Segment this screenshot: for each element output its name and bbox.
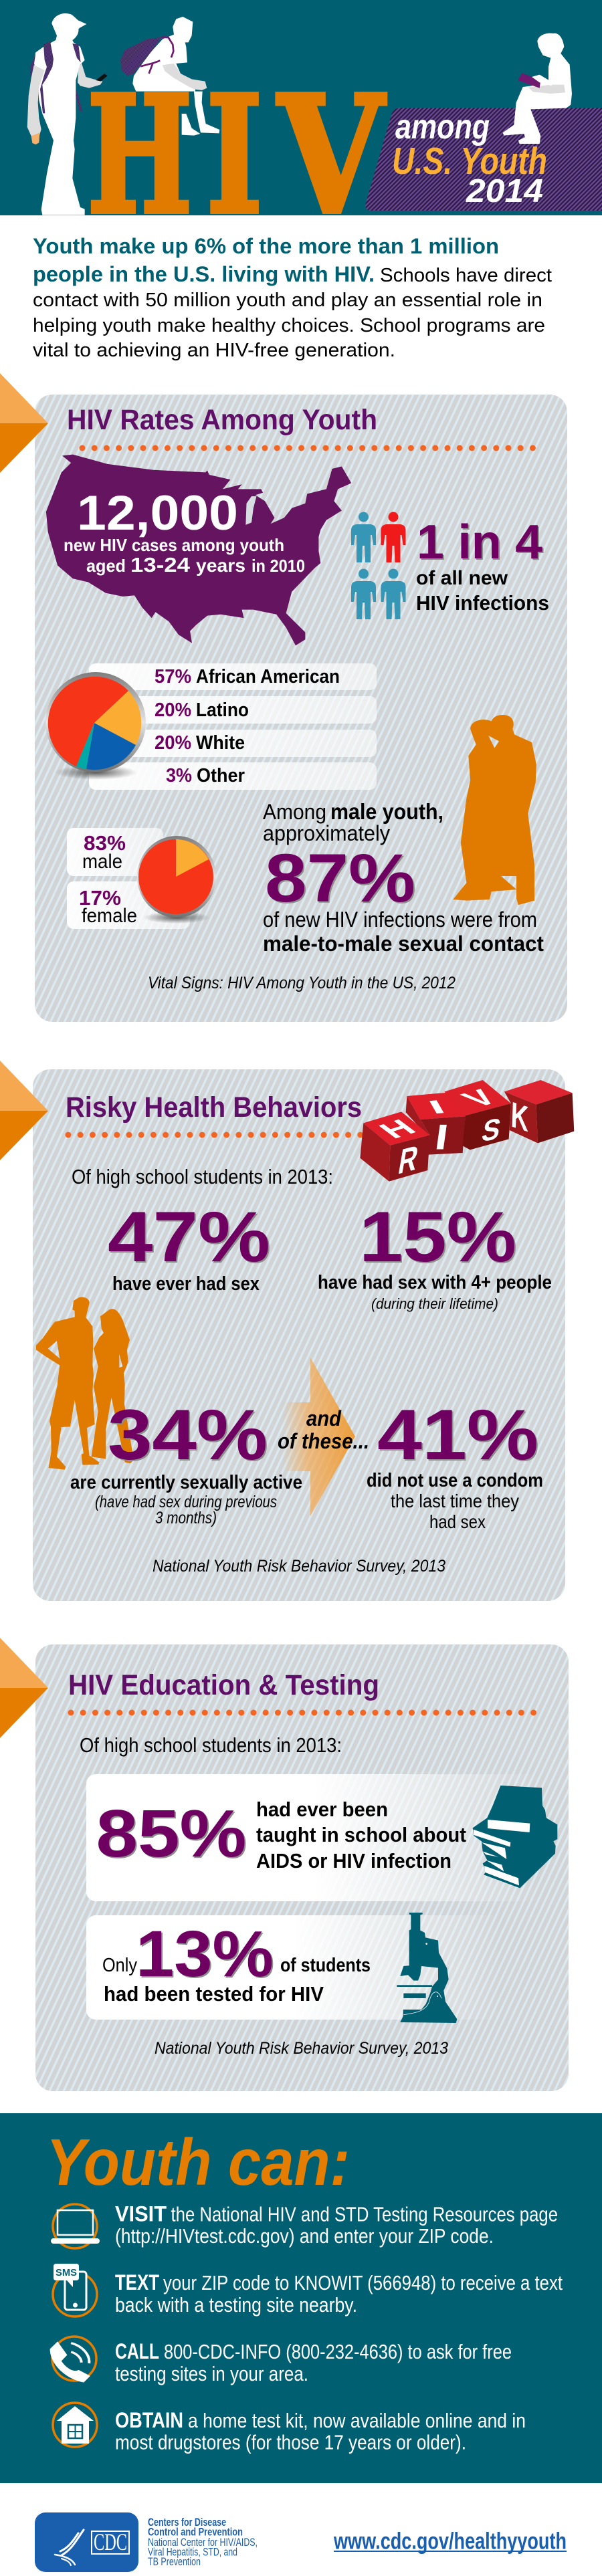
heading: Risky Health Behaviors: Risky Health Behaviors bbox=[66, 1091, 362, 1123]
race breakdown bars: Latino bbox=[196, 700, 249, 721]
item: obtain: most drugstores (for those 17 years or older). bbox=[115, 2430, 466, 2454]
source note: National Youth Risk Behavior Survey, 2013 bbox=[155, 2039, 448, 2058]
item: call: CALL bbox=[115, 2339, 159, 2363]
item: text: back with a testing site nearby. bbox=[115, 2293, 357, 2317]
stat: 34%: (have had sex during previous bbox=[95, 1493, 277, 1511]
race breakdown bars: 57% bbox=[155, 666, 191, 687]
stat: 1 in 4: of all new bbox=[416, 567, 508, 589]
card: 85% taught in school: 85% bbox=[96, 1796, 246, 1871]
map statistic bbox=[64, 486, 305, 576]
stat: 1 in 4: 1 in 4 bbox=[417, 516, 542, 569]
CDC organization text: TB Prevention bbox=[148, 2555, 201, 2568]
HIV RISK dice: R bbox=[395, 1138, 421, 1182]
item: call bbox=[115, 2339, 512, 2385]
intro text block: vital to achieving an HIV-free generation. bbox=[33, 340, 395, 361]
race breakdown bars: Other bbox=[197, 765, 245, 786]
subtitle text: U.S. Youth bbox=[392, 140, 547, 183]
intro text block: helping youth make healthy choices. School programs are bbox=[33, 315, 545, 336]
stat: 1 in 4: HIV infections bbox=[416, 591, 549, 615]
CDC organization text: National Center for HIV/AIDS, bbox=[148, 2536, 258, 2549]
card: 13% tested: had been tested for HIV bbox=[104, 1982, 324, 2006]
section arrow bbox=[0, 373, 48, 473]
intro text block bbox=[33, 234, 552, 361]
pie chart: gender bbox=[137, 836, 216, 924]
map statistic: 12,000 bbox=[77, 486, 238, 540]
subtitle text: among bbox=[395, 108, 490, 146]
stat: 34%: 3 months) bbox=[155, 1509, 217, 1527]
couple silhouette bbox=[453, 715, 536, 905]
stat: 15%: have had sex with 4+ people bbox=[318, 1272, 552, 1293]
card: 85% taught in school: had ever been bbox=[256, 1798, 388, 1821]
CDC organization text: Viral Hepatitis, STD, and bbox=[148, 2545, 237, 2559]
purple subtitle block bbox=[365, 108, 602, 211]
heading: HIV Education & Testing: HIV Education & Testing bbox=[68, 1669, 379, 1701]
HIV large letters: V bbox=[277, 60, 386, 250]
icon: telephone handset bbox=[50, 2337, 96, 2383]
gender labels: female bbox=[82, 905, 137, 927]
gender labels: 17% bbox=[79, 886, 121, 909]
panel: HIV rates among youth bbox=[0, 373, 567, 1022]
male youth statistic: of new HIV infections were from bbox=[263, 907, 537, 932]
heading: HIV Rates Among Youth: HIV Rates Among Youth bbox=[67, 404, 377, 436]
HIV large letters: H bbox=[87, 60, 193, 250]
card: 85% taught in school: taught in school about bbox=[256, 1823, 466, 1846]
arrow: and of these: and bbox=[306, 1406, 342, 1430]
icon: phone with SMS bbox=[53, 2264, 97, 2317]
stat: 1 in 4 bbox=[416, 516, 549, 615]
HIV RISK dice: I bbox=[424, 1097, 449, 1118]
race breakdown bars: 20% bbox=[155, 732, 191, 754]
icon: four people, one highlighted bbox=[351, 512, 405, 619]
map statistic: in 2010 bbox=[252, 556, 305, 576]
race breakdown bars: White bbox=[196, 732, 245, 754]
item: visit: (http://HIVtest.cdc.gov) and enter your ZIP code. bbox=[115, 2224, 494, 2248]
arrow: and of these: of these... bbox=[278, 1429, 369, 1453]
US map bbox=[46, 455, 351, 645]
lead-in text: Of high school students in 2013: bbox=[72, 1165, 333, 1188]
item: call: testing sites in your area. bbox=[115, 2362, 308, 2385]
stat: 15% bbox=[318, 1196, 552, 1312]
map statistic: aged bbox=[86, 556, 126, 576]
stat: 34% bbox=[70, 1394, 302, 1527]
arrow: and of these bbox=[278, 1358, 369, 1516]
HIV RISK dice bbox=[360, 1080, 574, 1182]
source note: National Youth Risk Behavior Survey, 2013 bbox=[153, 1557, 445, 1576]
stat: 47%: 47% bbox=[108, 1196, 270, 1277]
card: 85% taught in school: AIDS or HIV infection bbox=[256, 1849, 452, 1872]
HHS eagle emblem bbox=[55, 2530, 84, 2565]
heading: Youth can: Youth can: bbox=[46, 2125, 350, 2199]
gender labels: 83% bbox=[84, 831, 126, 855]
lead-in text: Of high school students in 2013: bbox=[80, 1733, 342, 1757]
couple silhouette bbox=[36, 1297, 134, 1470]
male youth statistic bbox=[263, 799, 544, 956]
intro text block: contact with 50 million youth and play an essential role in bbox=[33, 290, 542, 311]
HIV RISK dice: V bbox=[454, 1085, 505, 1111]
card: 13% tested bbox=[86, 1915, 501, 2020]
CDC logo bbox=[35, 2512, 138, 2572]
stat: 34%: are currently sexually active bbox=[70, 1472, 302, 1493]
card: 85% taught in school bbox=[86, 1774, 541, 1901]
gender labels bbox=[67, 828, 190, 929]
intro text block: Youth make up 6% of the more than 1 million bbox=[33, 234, 499, 258]
header banner bbox=[0, 0, 602, 250]
icon: phone with SMS: SMS bbox=[56, 2267, 77, 2278]
item: text: TEXT bbox=[115, 2270, 159, 2294]
male youth statistic: male youth, bbox=[330, 799, 443, 824]
map statistic: years bbox=[196, 555, 245, 576]
item: visit: VISIT bbox=[115, 2202, 167, 2226]
HIV RISK dice: S bbox=[479, 1112, 503, 1149]
HIV RISK dice: K bbox=[510, 1094, 530, 1140]
HIV RISK dice: I bbox=[432, 1117, 451, 1158]
map statistic: 13-24 bbox=[130, 553, 191, 576]
item: obtain: OBTAIN bbox=[115, 2408, 183, 2432]
stat: 15%: 15% bbox=[359, 1196, 516, 1277]
male youth statistic: approximately bbox=[263, 821, 390, 845]
panel: HIV education and testing bbox=[0, 1638, 569, 2091]
HIV RISK dice: H bbox=[371, 1115, 423, 1143]
icon: microscope bbox=[397, 1913, 457, 2023]
item: obtain: a home test kit, now available online and in bbox=[188, 2409, 526, 2432]
panel: risky health behaviors bbox=[0, 1061, 574, 1601]
card: 13% tested: 13% bbox=[136, 1917, 274, 1990]
gender labels: male bbox=[82, 851, 122, 873]
subtitle text: 2014 bbox=[466, 173, 543, 209]
male youth statistic: male-to-male sexual contact bbox=[263, 932, 544, 956]
subtitle text bbox=[392, 108, 547, 209]
map statistic: new HIV cases among youth bbox=[64, 535, 284, 555]
race breakdown bars: 3% bbox=[166, 765, 192, 786]
icon: house bbox=[53, 2403, 97, 2447]
stat: 41%: did not use a condom bbox=[367, 1470, 543, 1491]
stat: 15%: (during their lifetime) bbox=[371, 1295, 498, 1312]
stat: 41%: had sex bbox=[429, 1511, 486, 1532]
male youth statistic: 87% bbox=[265, 840, 415, 916]
item: obtain bbox=[115, 2408, 526, 2454]
item: visit bbox=[115, 2202, 558, 2248]
section arrow bbox=[0, 1061, 48, 1160]
intro text block: Schools have direct bbox=[380, 265, 552, 286]
item: call: 800-CDC-INFO (800-232-4636) to ask for free bbox=[164, 2340, 512, 2363]
icon: laptop bbox=[51, 2204, 100, 2248]
item: text bbox=[115, 2270, 563, 2317]
reading student figure bbox=[503, 33, 572, 144]
panel: Youth can bbox=[0, 2113, 602, 2483]
stat: 47%: have ever had sex bbox=[112, 1273, 260, 1295]
CDC organization text: Centers for Disease bbox=[148, 2516, 226, 2529]
stat: 41%: 41% bbox=[377, 1394, 538, 1475]
CDC logo: CDC bbox=[94, 2529, 127, 2555]
race breakdown bars bbox=[89, 663, 377, 790]
pie chart: race bbox=[45, 672, 146, 780]
CDC organization text bbox=[148, 2516, 258, 2568]
stat: 41% bbox=[367, 1394, 543, 1532]
card: 13% tested: Only bbox=[102, 1955, 137, 1976]
card: 13% tested: of students bbox=[280, 1955, 371, 1976]
standing student figure bbox=[27, 13, 108, 215]
sitting student figure bbox=[120, 17, 219, 136]
source note: Vital Signs: HIV Among Youth in the US, 2012 bbox=[148, 974, 456, 992]
HIV large letters: I bbox=[206, 60, 262, 250]
stat: 34%: 34% bbox=[108, 1394, 268, 1475]
male youth statistic: Among bbox=[263, 800, 326, 824]
HIV large letters bbox=[87, 60, 386, 250]
section arrow bbox=[0, 1638, 48, 1738]
race breakdown bars: African American bbox=[196, 666, 340, 687]
race breakdown bars: 20% bbox=[155, 700, 191, 721]
icon: books bbox=[473, 1786, 557, 1888]
CDC organization text: Control and Prevention bbox=[148, 2525, 243, 2539]
intro text block: people in the U.S. living with HIV. bbox=[33, 262, 375, 286]
stat: 41%: the last time they bbox=[391, 1491, 519, 1511]
